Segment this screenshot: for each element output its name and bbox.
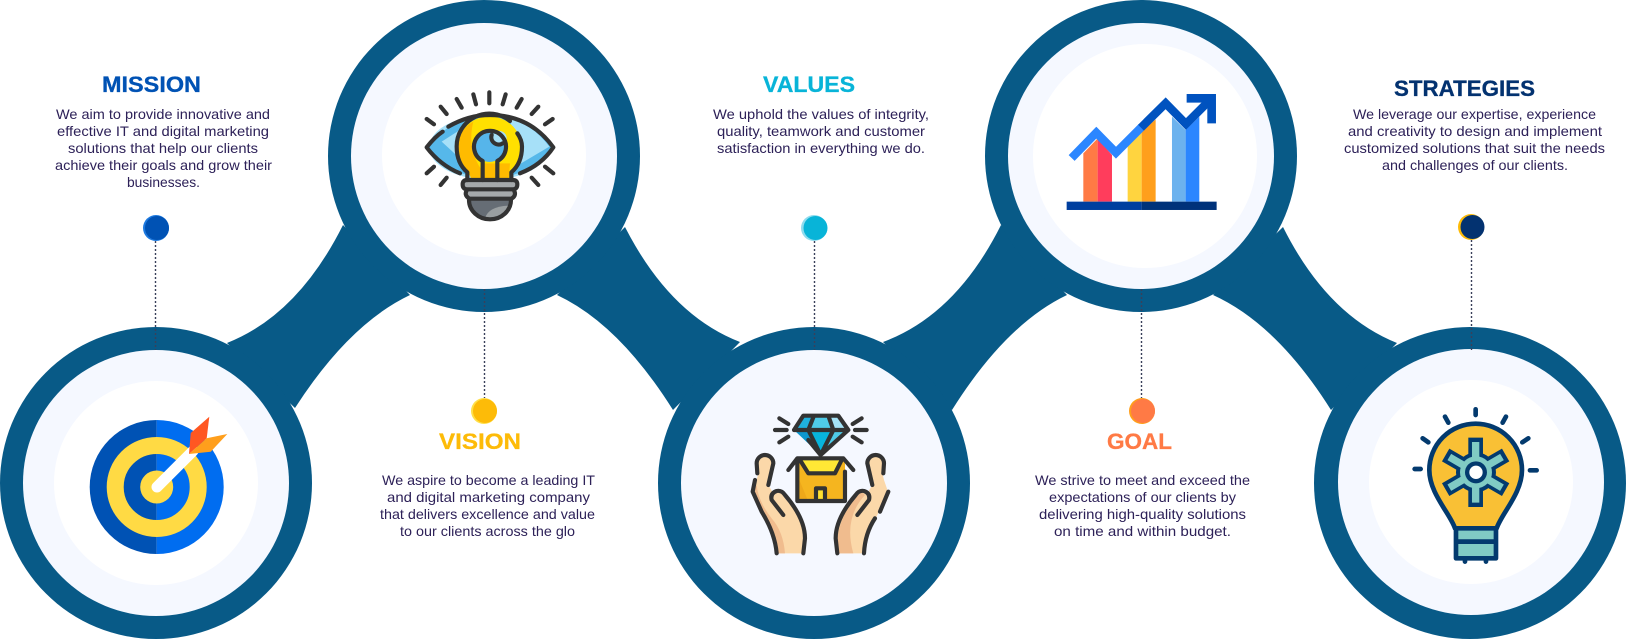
marker: vision dot xyxy=(471,398,497,424)
panel: mission text: MISSION xyxy=(102,72,201,97)
panel: vision text xyxy=(380,429,595,539)
connector: values dotted line xyxy=(814,241,816,350)
panel: values text: We uphold the values of integrity, xyxy=(713,106,929,122)
panel: mission text xyxy=(55,72,272,190)
icon: hands holding box with diamond xyxy=(753,416,888,553)
panel: vision text: We aspire to become a leading IT xyxy=(382,472,595,488)
icon: light bulb with gear xyxy=(1415,409,1537,562)
panel: strategies text: customized solutions that suit the needs xyxy=(1344,140,1605,156)
panel: goal text: on time and within budget. xyxy=(1054,523,1231,539)
panel: goal text: delivering high-quality solutions xyxy=(1039,506,1246,522)
icon: rising bar chart with arrow xyxy=(1067,94,1217,210)
panel: mission text: businesses. xyxy=(127,174,200,190)
panel: strategies text: STRATEGIES xyxy=(1394,76,1535,101)
connector: vision dotted line xyxy=(484,289,486,398)
connector: mission dotted line xyxy=(154,241,156,350)
panel: vision text: and digital marketing company xyxy=(387,489,590,505)
panel: goal text: We strive to meet and exceed the xyxy=(1035,472,1250,488)
marker: strategies dot xyxy=(1458,214,1484,240)
panel: goal text: expectations of our clients by xyxy=(1049,489,1236,505)
icon: target with arrow xyxy=(90,417,227,554)
panel: mission text: achieve their goals and grow their xyxy=(55,157,272,173)
panel: vision text: VISION xyxy=(439,429,521,454)
panel: strategies text xyxy=(1344,76,1605,173)
marker: goal dot xyxy=(1129,398,1155,424)
connector: goal dotted line xyxy=(1140,289,1142,398)
panel: mission text: We aim to provide innovative and xyxy=(56,106,270,122)
icon: light bulb in eye xyxy=(427,92,553,220)
panel: goal text xyxy=(1035,429,1250,539)
connector: strategies dotted line xyxy=(1470,240,1472,350)
panel: goal text: GOAL xyxy=(1107,429,1172,454)
panel: values text: VALUES xyxy=(763,72,855,97)
panel: values text: satisfaction in everything we do. xyxy=(717,140,925,156)
panel: strategies text: and creativity to design and implement xyxy=(1348,123,1602,139)
marker: mission dot xyxy=(143,215,169,241)
panel: values text: quality, teamwork and customer xyxy=(717,123,925,139)
panel: vision text: to our clients across the glo xyxy=(400,523,575,539)
panel: vision text: that delivers excellence and value xyxy=(380,506,595,522)
panel: mission text: solutions that help our clients xyxy=(68,140,258,156)
panel: strategies text: and challenges of our clients. xyxy=(1382,157,1568,173)
panel: values text xyxy=(713,72,929,156)
marker: values dot xyxy=(801,215,828,241)
panel: mission text: effective IT and digital marketing xyxy=(57,123,269,139)
panel: strategies text: We leverage our expertise, experience xyxy=(1353,106,1596,122)
